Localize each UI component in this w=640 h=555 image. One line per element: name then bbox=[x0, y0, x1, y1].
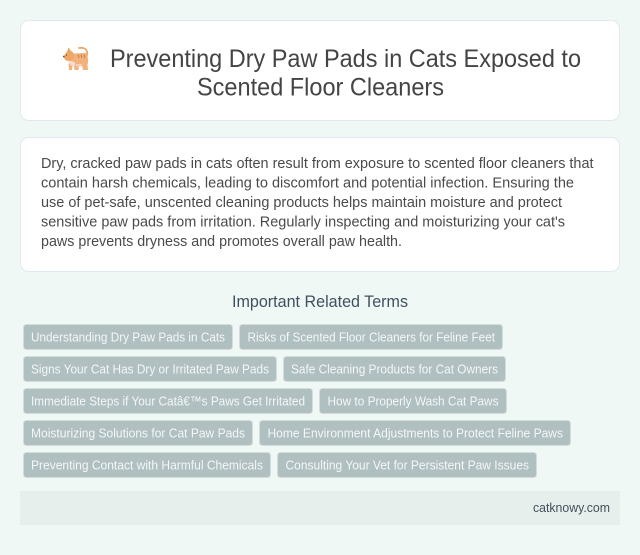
tag 2 bbox=[240, 324, 502, 350]
tag 7: Moisturizing Solutions for Cat Paw Pads bbox=[31, 426, 245, 440]
tag 3 bbox=[24, 356, 276, 382]
tag 6: How to Properly Wash Cat Paws bbox=[328, 394, 499, 408]
title text: Scented Floor Cleaners bbox=[197, 74, 444, 102]
tag 8: Home Environment Adjustments to Protect Feline Paws bbox=[268, 426, 563, 440]
tag 4: Safe Cleaning Products for Cat Owners bbox=[291, 362, 498, 376]
tag 6 bbox=[320, 388, 506, 414]
tag 8 bbox=[260, 420, 570, 446]
tag 7 bbox=[24, 420, 252, 446]
heading: related terms: Important Related Terms bbox=[232, 292, 408, 311]
panel: title card bbox=[20, 20, 620, 120]
panel: description bbox=[20, 138, 620, 272]
description text bbox=[41, 155, 594, 250]
tag 9 bbox=[24, 452, 270, 478]
footer bar bbox=[20, 491, 620, 525]
description text: paws prevents dryness and promotes overall paw health. bbox=[41, 233, 402, 250]
tag 2: Risks of Scented Floor Cleaners for Feline Feet bbox=[248, 330, 495, 344]
description text: use of pet-safe, unscented cleaning products helps maintain moisture and protect bbox=[41, 194, 563, 211]
tag 5 bbox=[24, 388, 312, 414]
tag 3: Signs Your Cat Has Dry or Irritated Paw Pads bbox=[31, 362, 269, 376]
description text: sensitive paw pads from irritation. Regularly inspecting and moisturizing your cat's bbox=[41, 214, 565, 230]
description text: contain harsh chemicals, leading to discomfort and potential infection. Ensuring the bbox=[41, 174, 574, 192]
description text: Dry, cracked paw pads in cats often result from exposure to scented floor cleaners that bbox=[41, 155, 594, 172]
tag 1 bbox=[24, 324, 232, 350]
tag 5: Immediate Steps if Your Catâ€™s Paws Get Irritated bbox=[31, 394, 305, 408]
tag 1: Understanding Dry Paw Pads in Cats bbox=[31, 330, 225, 344]
title text bbox=[110, 45, 581, 102]
title text: Preventing Dry Paw Pads in Cats Exposed to bbox=[110, 45, 581, 73]
tag 10: Consulting Your Vet for Persistent Paw Issues bbox=[286, 458, 529, 472]
footer site name: catknowy.com bbox=[533, 500, 610, 515]
icon: cat bbox=[63, 48, 88, 70]
tag list bbox=[24, 324, 570, 478]
tag 4 bbox=[284, 356, 506, 382]
tag 10 bbox=[278, 452, 536, 478]
tag 9: Preventing Contact with Harmful Chemicals bbox=[31, 458, 263, 472]
